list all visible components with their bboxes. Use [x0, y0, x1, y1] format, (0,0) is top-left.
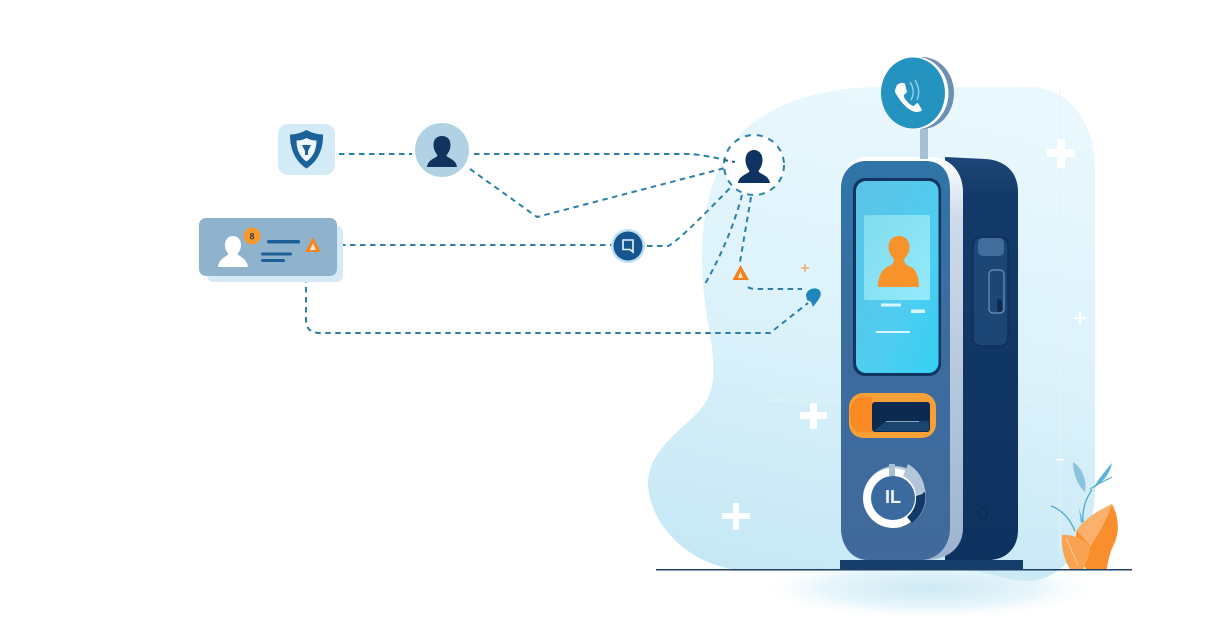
person node [415, 123, 469, 177]
icon: shield [290, 130, 323, 168]
connector lines [306, 154, 808, 333]
signal post [881, 56, 954, 159]
main person node [724, 135, 784, 195]
dial [863, 464, 926, 528]
disc back [890, 57, 954, 129]
document node [611, 229, 645, 263]
kiosk front body [841, 157, 963, 560]
icon: document [623, 240, 633, 252]
faint grid [765, 90, 1095, 560]
disc face [882, 56, 948, 130]
screen photo card [864, 215, 930, 300]
icon: main person [738, 150, 770, 183]
kiosk [840, 157, 1023, 570]
icon: blue pin [806, 288, 821, 307]
orange badge: 8 [249, 232, 255, 242]
ID card [199, 218, 343, 282]
side indicator [979, 508, 987, 520]
card portrait [218, 236, 248, 267]
screen text lines [876, 304, 925, 333]
background blob [648, 87, 1095, 581]
icon: phone [895, 83, 922, 112]
dial label: IL [885, 487, 901, 507]
icon: signal waves [910, 80, 919, 100]
inner connector stub [724, 160, 735, 162]
ground line [656, 569, 1132, 570]
sparkle crosses [722, 139, 1086, 530]
plant stems and blue leaves [1051, 462, 1112, 531]
icon: card warning [305, 237, 321, 252]
kiosk screen [853, 178, 941, 376]
orange badge [244, 228, 260, 244]
orange leaves [1076, 504, 1118, 569]
card text lines [261, 240, 300, 262]
kiosk side body [945, 157, 1018, 560]
plant [1051, 462, 1118, 569]
warning triangle [732, 265, 749, 280]
side panel [973, 237, 1008, 346]
shield tile [278, 124, 335, 175]
kiosk base [840, 560, 1023, 570]
icon: person [427, 136, 457, 167]
floor shadow [755, 556, 1105, 620]
pole [920, 126, 928, 159]
screen portrait [878, 236, 919, 287]
icon: small orange plus [801, 264, 809, 272]
card slot [849, 393, 936, 438]
